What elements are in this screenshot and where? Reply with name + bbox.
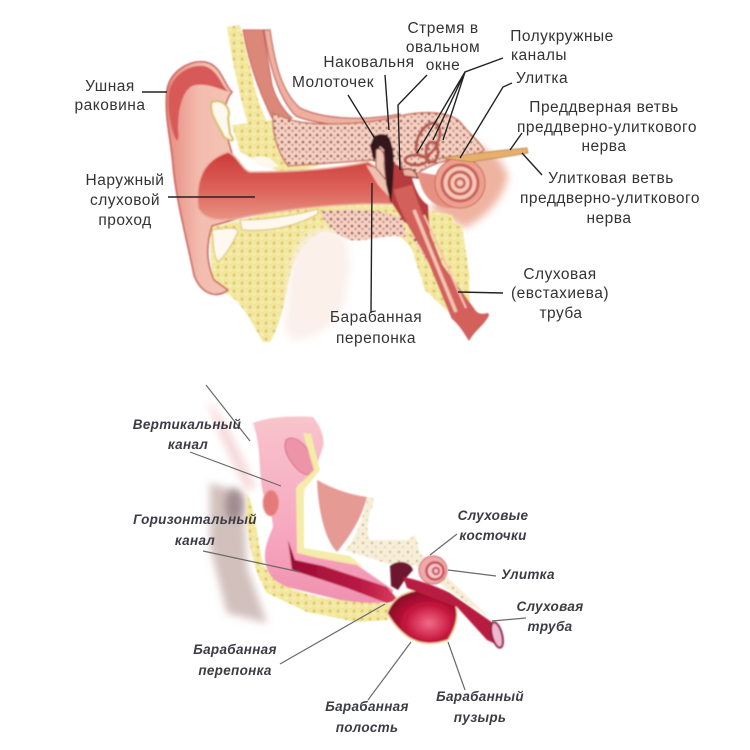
- scalp stripes: [227, 25, 276, 150]
- label: semicircular canals: каналы: [511, 47, 567, 64]
- label: eustachian tube: труба: [539, 305, 583, 322]
- pinna: [166, 62, 250, 294]
- label: malleus: Молоточек: [292, 74, 374, 91]
- callout lines: bottom diagram: [190, 385, 526, 700]
- label: vestibular nerve: нерва: [582, 138, 626, 155]
- label: vestibular nerve: преддверно-улиткового: [517, 119, 697, 136]
- cochlea: [419, 556, 447, 584]
- vertical canal folds: [285, 438, 314, 475]
- tympanic cavity: [387, 590, 457, 643]
- label: ossicles: косточки: [459, 528, 527, 543]
- middle ear cavity: [388, 160, 430, 235]
- speckled halo: [430, 140, 508, 228]
- canal swelling: [263, 490, 279, 516]
- horizontal canal dark: [288, 540, 398, 603]
- label: external auditory canal: Наружный: [86, 172, 164, 189]
- label: vestibular nerve: Преддверная ветвь: [529, 99, 679, 116]
- tube opening: [489, 621, 505, 649]
- label: eardrum: перепонка: [336, 330, 416, 347]
- label: auricle: раковина: [75, 97, 145, 114]
- label: auditory tube: Слуховая: [517, 599, 583, 614]
- label: vertical canal: Вертикальный: [133, 417, 241, 432]
- label: stapes: овальном: [406, 39, 480, 56]
- label: cochlear nerve: нерва: [587, 210, 631, 227]
- label: horizontal canal: Горизонтальный: [133, 512, 257, 527]
- white cartilage lower: [240, 209, 318, 230]
- label: stapes: Стремя в: [407, 20, 479, 37]
- grey fur: [210, 483, 267, 623]
- top labels: [75, 20, 700, 347]
- ossicles: [390, 562, 413, 590]
- yellow strip: [296, 433, 362, 566]
- red muscle patch: [317, 480, 367, 552]
- dark cavity: [370, 134, 394, 204]
- label: stapes: окне: [426, 57, 460, 74]
- yellow tissue upper: [232, 120, 322, 174]
- label: horizontal canal: канал: [175, 533, 215, 548]
- pinna rim: [168, 66, 229, 140]
- label: external auditory canal: проход: [98, 212, 152, 229]
- bottom labels: [133, 417, 583, 735]
- label: cochlear nerve: Улитковая ветвь: [548, 170, 674, 187]
- label: auricle: Ушная: [85, 78, 135, 95]
- label: auditory tube: труба: [528, 619, 573, 634]
- cochlea: [418, 158, 485, 208]
- stapes: [398, 152, 418, 178]
- mastoid area: [284, 229, 350, 340]
- eustachian tube: [394, 185, 488, 340]
- yellow tissue: [247, 493, 392, 622]
- label: semicircular canals: Полукружные: [510, 28, 614, 45]
- label: tympanic cavity: Барабанная: [325, 699, 409, 714]
- diagram: canine ear cross-section: [208, 400, 505, 649]
- semicircular canals: [405, 119, 445, 165]
- label: cochlea: Улитка: [516, 70, 568, 87]
- label: tympanic bulla: пузырь: [454, 710, 506, 725]
- diagram: human ear cross-section: [166, 25, 528, 342]
- label: tympanic cavity: полость: [336, 720, 398, 735]
- label: eardrum: перепонка: [198, 663, 272, 678]
- vertical canal pink: [253, 417, 393, 603]
- label: eardrum: Барабанная: [193, 642, 277, 657]
- eardrum: [366, 165, 392, 200]
- bone: [345, 497, 490, 618]
- auditory ossicles: [376, 149, 386, 180]
- white cartilage upper: [211, 101, 233, 140]
- fur dark patch: [225, 489, 243, 521]
- label: ossicles: Слуховые: [458, 508, 528, 523]
- callout lines: top diagram: [142, 58, 542, 313]
- lower speckled bone: [320, 210, 408, 240]
- upper skin streaks: [208, 400, 256, 490]
- label: eustachian tube: Слуховая: [523, 266, 597, 283]
- label: eardrum: Барабанная: [330, 309, 422, 326]
- label: vertical canal: канал: [168, 437, 208, 452]
- label: cochlear nerve: преддверно-улиткового: [520, 190, 700, 207]
- label: eustachian tube: (евстахиева): [511, 285, 609, 302]
- ear canal: [197, 152, 392, 220]
- soft tissue below ear: [210, 205, 470, 342]
- temporal bone speckled: [273, 113, 484, 178]
- nerve branches: [440, 148, 528, 162]
- label: external auditory canal: слуховой: [90, 192, 160, 209]
- label: tympanic bulla: Барабанный: [436, 689, 524, 704]
- label: cochlea: Улитка: [501, 567, 555, 582]
- tube: [403, 577, 500, 646]
- label: incus: Наковальня: [323, 54, 415, 71]
